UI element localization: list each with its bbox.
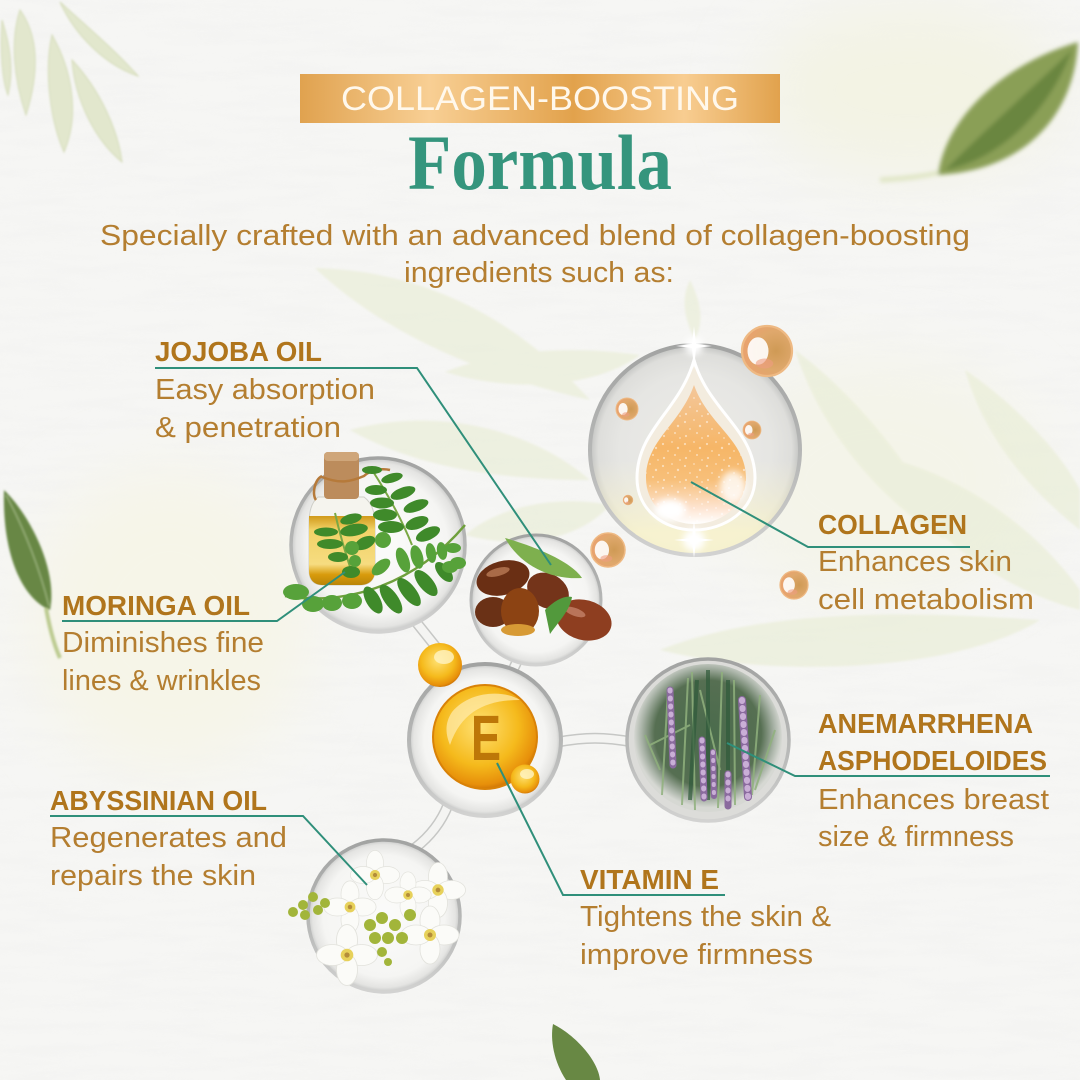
floating pearls [591, 326, 808, 599]
label: collagen [818, 509, 1034, 616]
jojoba seeds [473, 538, 616, 647]
label: vitamin E [580, 864, 831, 971]
label: collagen: Enhances skin [818, 546, 1012, 578]
bubble: abyssinian [288, 840, 466, 992]
label: vitamin E: Tightens the skin & [580, 901, 831, 933]
collagen oil drop [637, 326, 755, 558]
title banner: COLLAGEN-BOOSTING [341, 80, 739, 118]
bubble: jojoba [471, 535, 616, 665]
leader lines [50, 368, 1050, 895]
intro text: ingredients such as: [404, 257, 674, 289]
grass and flowers [645, 670, 775, 810]
label: abyssinian oil [50, 785, 287, 892]
label: abyssinian oil: Regenerates and [50, 822, 287, 854]
green buds [288, 892, 416, 966]
label: anemarrhena asphodeloides [818, 708, 1049, 853]
label: abyssinian oil: repairs the skin [50, 860, 256, 892]
gold droplets [418, 643, 540, 794]
oil bottle [309, 452, 390, 585]
label: moringa oil: lines & wrinkles [62, 665, 261, 697]
white flowers [317, 850, 466, 985]
intro text [100, 220, 970, 289]
corner leaves: top left [1, 2, 138, 162]
label: anemarrhena asphodeloides: ASPHODELOIDES [818, 745, 1047, 776]
bubble: vitamin E [409, 643, 561, 816]
label: jojoba oil: & penetration [155, 412, 341, 444]
bubble: moringa [283, 452, 466, 632]
label: moringa oil [62, 590, 264, 697]
bubble: anemarrhena [627, 659, 789, 821]
leaf: bottom [552, 1024, 600, 1080]
label: vitamin E: improve firmness [580, 939, 813, 971]
leaf: top right [880, 42, 1078, 180]
glass connector tubes [415, 622, 632, 848]
leaf: left [4, 490, 60, 658]
label: anemarrhena asphodeloides: ANEMARRHENA [818, 708, 1033, 739]
label: moringa oil: Diminishes fine [62, 627, 264, 659]
intro text: Specially crafted with an advanced blend of collagen-boosting [100, 220, 970, 252]
faint background leaves [315, 268, 1080, 667]
label: jojoba oil: JOJOBA OIL [155, 336, 322, 367]
label: moringa oil: MORINGA OIL [62, 590, 250, 621]
vitamin E capsule [433, 685, 537, 789]
label: vitamin E: VITAMIN E [580, 864, 719, 895]
label: jojoba oil: Easy absorption [155, 374, 375, 406]
heading: Formula: Formula [408, 119, 672, 206]
label: abyssinian oil: ABYSSINIAN OIL [50, 785, 267, 816]
label: collagen: COLLAGEN [818, 509, 967, 540]
moringa leaves [283, 466, 466, 617]
label: collagen: cell metabolism [818, 584, 1034, 616]
sparkle [674, 520, 714, 558]
label: anemarrhena asphodeloides: Enhances breast [818, 784, 1049, 816]
sparkle [676, 326, 712, 370]
label: anemarrhena asphodeloides: size & firmness [818, 821, 1014, 853]
bubble: collagen [590, 326, 808, 599]
label: jojoba oil [155, 336, 375, 444]
title banner [300, 74, 780, 123]
vitamin E capsule: E [471, 702, 501, 774]
